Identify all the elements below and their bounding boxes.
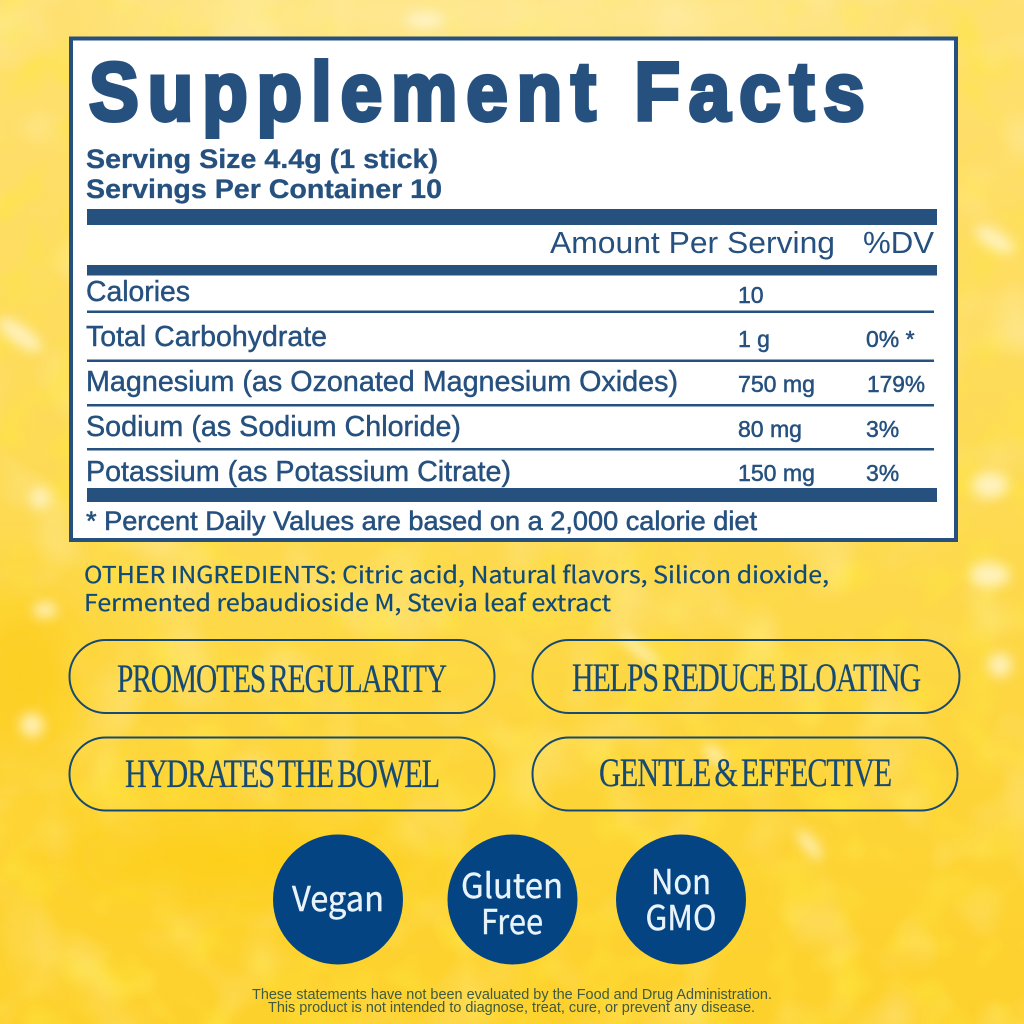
row: calories: 10 [738, 282, 764, 308]
badge: gluten free [448, 834, 578, 964]
pill: hydrates the bowel: HYDRATES THE BOWEL [125, 751, 439, 796]
row: magnesium: 179% [867, 371, 925, 397]
serving information: Serving Size 4.4g (1 stick) [86, 144, 438, 174]
badge: vegan: Vegan [292, 872, 384, 921]
badge: non gmo: Non [651, 855, 711, 904]
disclaimer: These statements have not been evaluated by the Food and Drug Administration. [252, 987, 772, 1003]
row: sodium: 80 mg [738, 416, 802, 442]
pill: helps reduce bloating [532, 640, 960, 713]
serving information [86, 144, 442, 204]
row: potassium: 150 mg [738, 460, 815, 486]
row: calories [86, 276, 764, 308]
row: total carbohydrate: 1 g [738, 326, 770, 352]
badge: non gmo: GMO [646, 891, 716, 940]
title: Supplement Facts [89, 45, 865, 138]
footnote: * Percent Daily Values are based on a 2,000 calorie diet [86, 506, 758, 536]
row: sodium: Sodium (as Sodium Chloride) [86, 411, 461, 443]
badge: vegan [273, 834, 403, 964]
row: potassium: 3% [866, 460, 899, 486]
badge: gluten free: Gluten [461, 859, 563, 908]
row: magnesium: Magnesium (as Ozonated Magnesium Oxides) [86, 366, 678, 398]
pill: promotes regularity: PROMOTES REGULARITY [117, 656, 446, 701]
disclaimer: This product is not intended to diagnose, treat, cure, or prevent any disease. [268, 1000, 755, 1016]
serving information: Servings Per Container 10 [86, 174, 442, 204]
row: total carbohydrate: Total Carbohydrate [86, 321, 327, 353]
pill: hydrates the bowel [70, 738, 494, 810]
badge: non gmo [616, 834, 746, 964]
badge: gluten free: Free [481, 895, 543, 944]
disclaimer [252, 987, 772, 1016]
row: calories: Calories [86, 276, 190, 308]
other ingredients text [84, 556, 829, 618]
row: total carbohydrate: 0% * [866, 326, 915, 352]
panel: supplement facts label [71, 38, 956, 540]
column headers: %DV [863, 225, 934, 260]
other ingredients text: Fermented rebaudioside M, Stevia leaf extract [84, 584, 611, 618]
pill: gentle and effective [532, 738, 958, 810]
pill: gentle and effective: GENTLE & EFFECTIVE [599, 750, 891, 795]
column headers: Amount Per Serving [550, 225, 835, 260]
row: sodium: 3% [866, 416, 899, 442]
row: magnesium: 750 mg [738, 371, 815, 397]
row: total carbohydrate [86, 321, 915, 353]
pill: promotes regularity [70, 640, 494, 713]
row: sodium [86, 411, 899, 443]
other ingredients text: OTHER INGREDIENTS: Citric acid, Natural flavors, Silicon dioxide, [84, 556, 829, 590]
row: potassium [86, 456, 899, 488]
row: potassium: Potassium (as Potassium Citrate) [86, 456, 511, 488]
pill: helps reduce bloating: HELPS REDUCE BLOATING [572, 655, 920, 700]
